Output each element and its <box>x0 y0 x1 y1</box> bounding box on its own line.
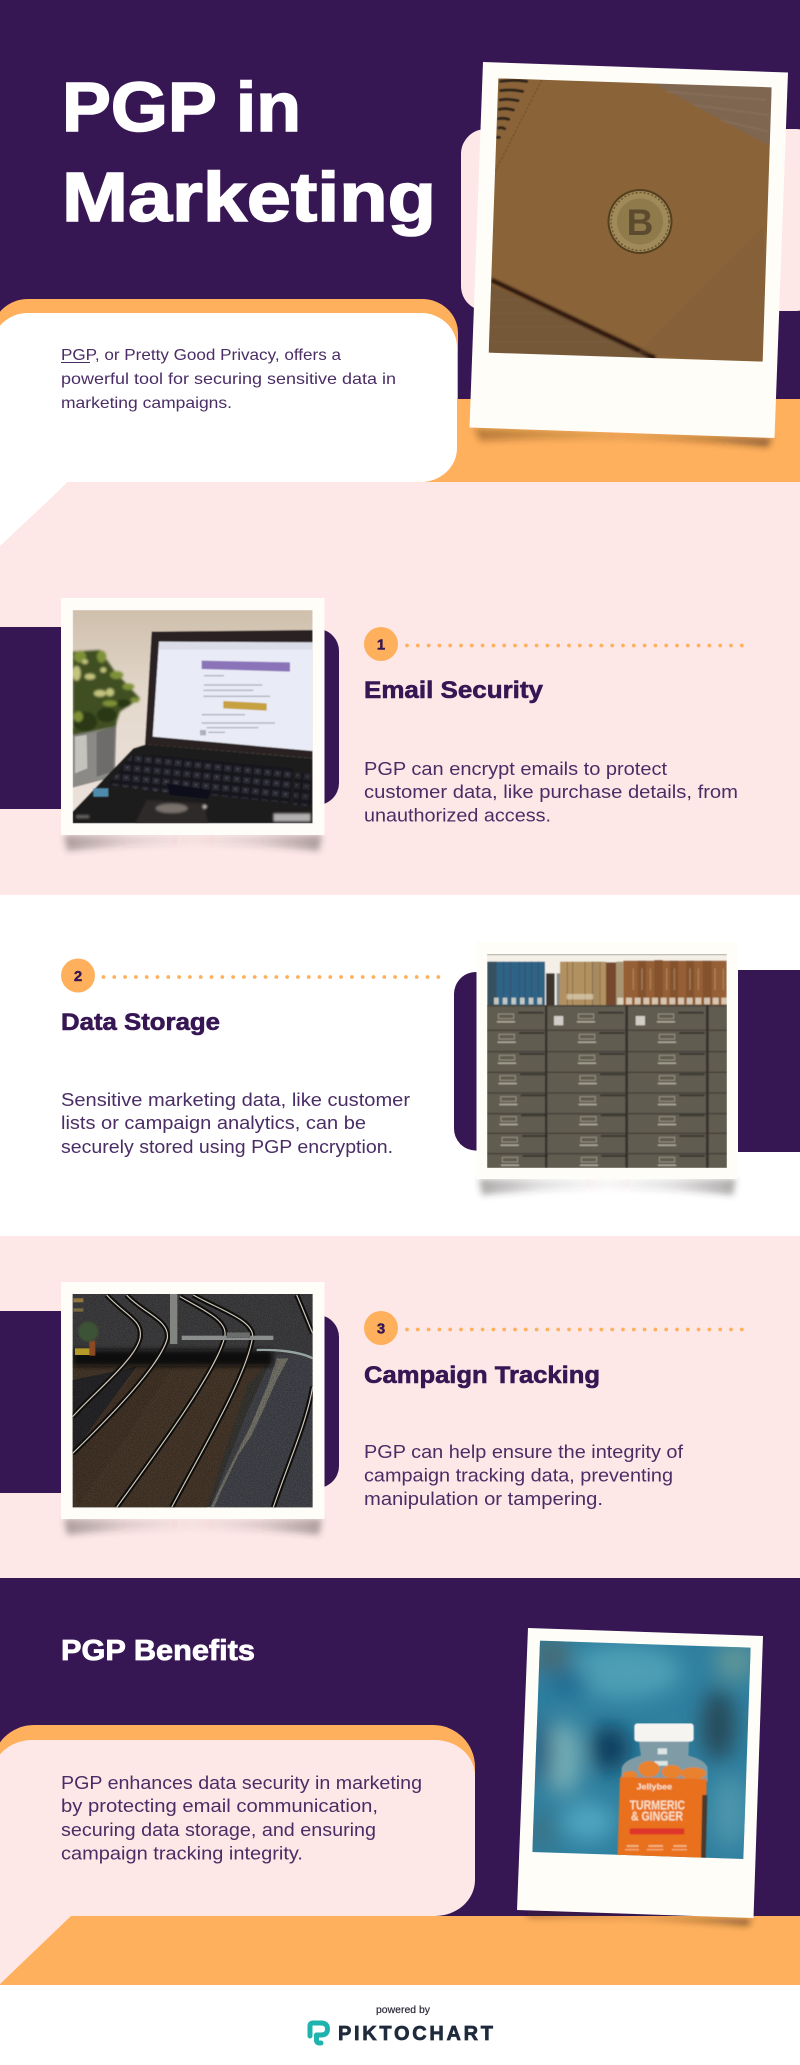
panel: PGP benefits <box>0 1578 800 1985</box>
body text: PGP can encrypt emails to protect <box>364 759 667 779</box>
polaroid: gummy bottle photo: TURMERIC <box>630 1798 685 1812</box>
heading: Campaign Tracking <box>364 1362 600 1389</box>
polaroid: gummy bottle photo <box>517 1628 763 1926</box>
white corner wedge <box>0 440 100 546</box>
white background <box>0 895 800 1237</box>
body text: campaign tracking integrity. <box>61 1844 303 1864</box>
photo: railway tracks <box>61 1282 324 1535</box>
dotted line <box>407 644 742 647</box>
powered by text: powered by <box>376 2004 431 2016</box>
heading: Data Storage <box>61 1009 220 1036</box>
polaroid: bitcoin photo <box>470 60 788 447</box>
dotted line <box>407 1328 742 1331</box>
panel: hero <box>0 0 800 489</box>
photo: filing cabinets <box>476 942 738 1195</box>
purple background <box>0 1578 800 1917</box>
pink background <box>0 482 800 895</box>
body text: campaign tracking data, preventing <box>364 1466 673 1486</box>
intro text: PGP, or Pretty Good Privacy, offers a <box>61 347 341 364</box>
body text: PGP enhances data security in marketing <box>61 1773 422 1793</box>
body text: securely stored using PGP encryption. <box>61 1137 393 1157</box>
icon: bitcoin coin: B <box>627 202 653 243</box>
body text <box>61 1090 410 1157</box>
purple bar left <box>0 1311 62 1493</box>
panel: campaign tracking <box>0 1236 800 1578</box>
number badge 2 <box>61 958 95 992</box>
purple shape right <box>290 629 339 805</box>
heading: PGP Benefits <box>61 1635 255 1667</box>
dotted line <box>104 975 439 979</box>
pink corner wedge <box>0 1880 100 1984</box>
title <box>62 68 436 236</box>
title: Marketing <box>62 158 436 236</box>
panel: data storage <box>61 954 800 1199</box>
purple shape right <box>290 1315 339 1488</box>
intro card <box>0 313 457 482</box>
body text: manipulation or tampering. <box>364 1489 603 1509</box>
body text: lists or campaign analytics, can be <box>61 1113 366 1133</box>
number badge 3: 3 <box>377 1320 385 1338</box>
body text: PGP can help ensure the integrity of <box>364 1442 684 1462</box>
body text <box>61 1773 422 1864</box>
orange band <box>0 1916 800 1985</box>
intro text: marketing campaigns. <box>61 395 232 412</box>
body text: unauthorized access. <box>364 806 551 826</box>
footer background <box>0 1985 800 2065</box>
pink card <box>0 1740 475 1916</box>
title: PGP in <box>62 68 301 146</box>
panel: email security <box>0 482 800 895</box>
body text: securing data storage, and ensuring <box>61 1820 376 1840</box>
intro card backing <box>0 299 458 489</box>
body text <box>364 759 738 826</box>
card backing <box>0 1725 475 1815</box>
footer <box>0 1985 800 2065</box>
purple bar right <box>738 970 800 1152</box>
number badge 3 <box>364 1311 398 1345</box>
photo: laptop <box>61 598 324 851</box>
number badge 1 <box>364 627 398 661</box>
polaroid: gummy bottle photo: Jellybee <box>636 1781 672 1791</box>
number badge 2: 2 <box>74 968 82 985</box>
purple shape left <box>454 972 504 1151</box>
polaroid: gummy bottle photo: & GINGER <box>631 1810 683 1824</box>
purple bar left <box>0 627 62 809</box>
icon: bitcoin coin <box>608 189 672 254</box>
piktochart wordmark: PIKTOCHART <box>338 2023 493 2045</box>
hero pink backing shape <box>461 129 800 311</box>
body text: customer data, like purchase details, from <box>364 782 738 802</box>
intro text: powerful tool for securing sensitive data in <box>61 371 396 388</box>
body text: Sensitive marketing data, like customer <box>61 1090 410 1110</box>
hero orange band <box>0 399 800 483</box>
intro text <box>61 347 396 412</box>
icon: piktochart logo <box>310 2023 328 2043</box>
heading: Email Security <box>364 677 544 704</box>
body text: by protecting email communication, <box>61 1796 378 1816</box>
number badge 1: 1 <box>377 636 385 654</box>
body text <box>364 1442 684 1509</box>
pink background <box>0 1236 800 1578</box>
hero purple background <box>0 0 800 400</box>
